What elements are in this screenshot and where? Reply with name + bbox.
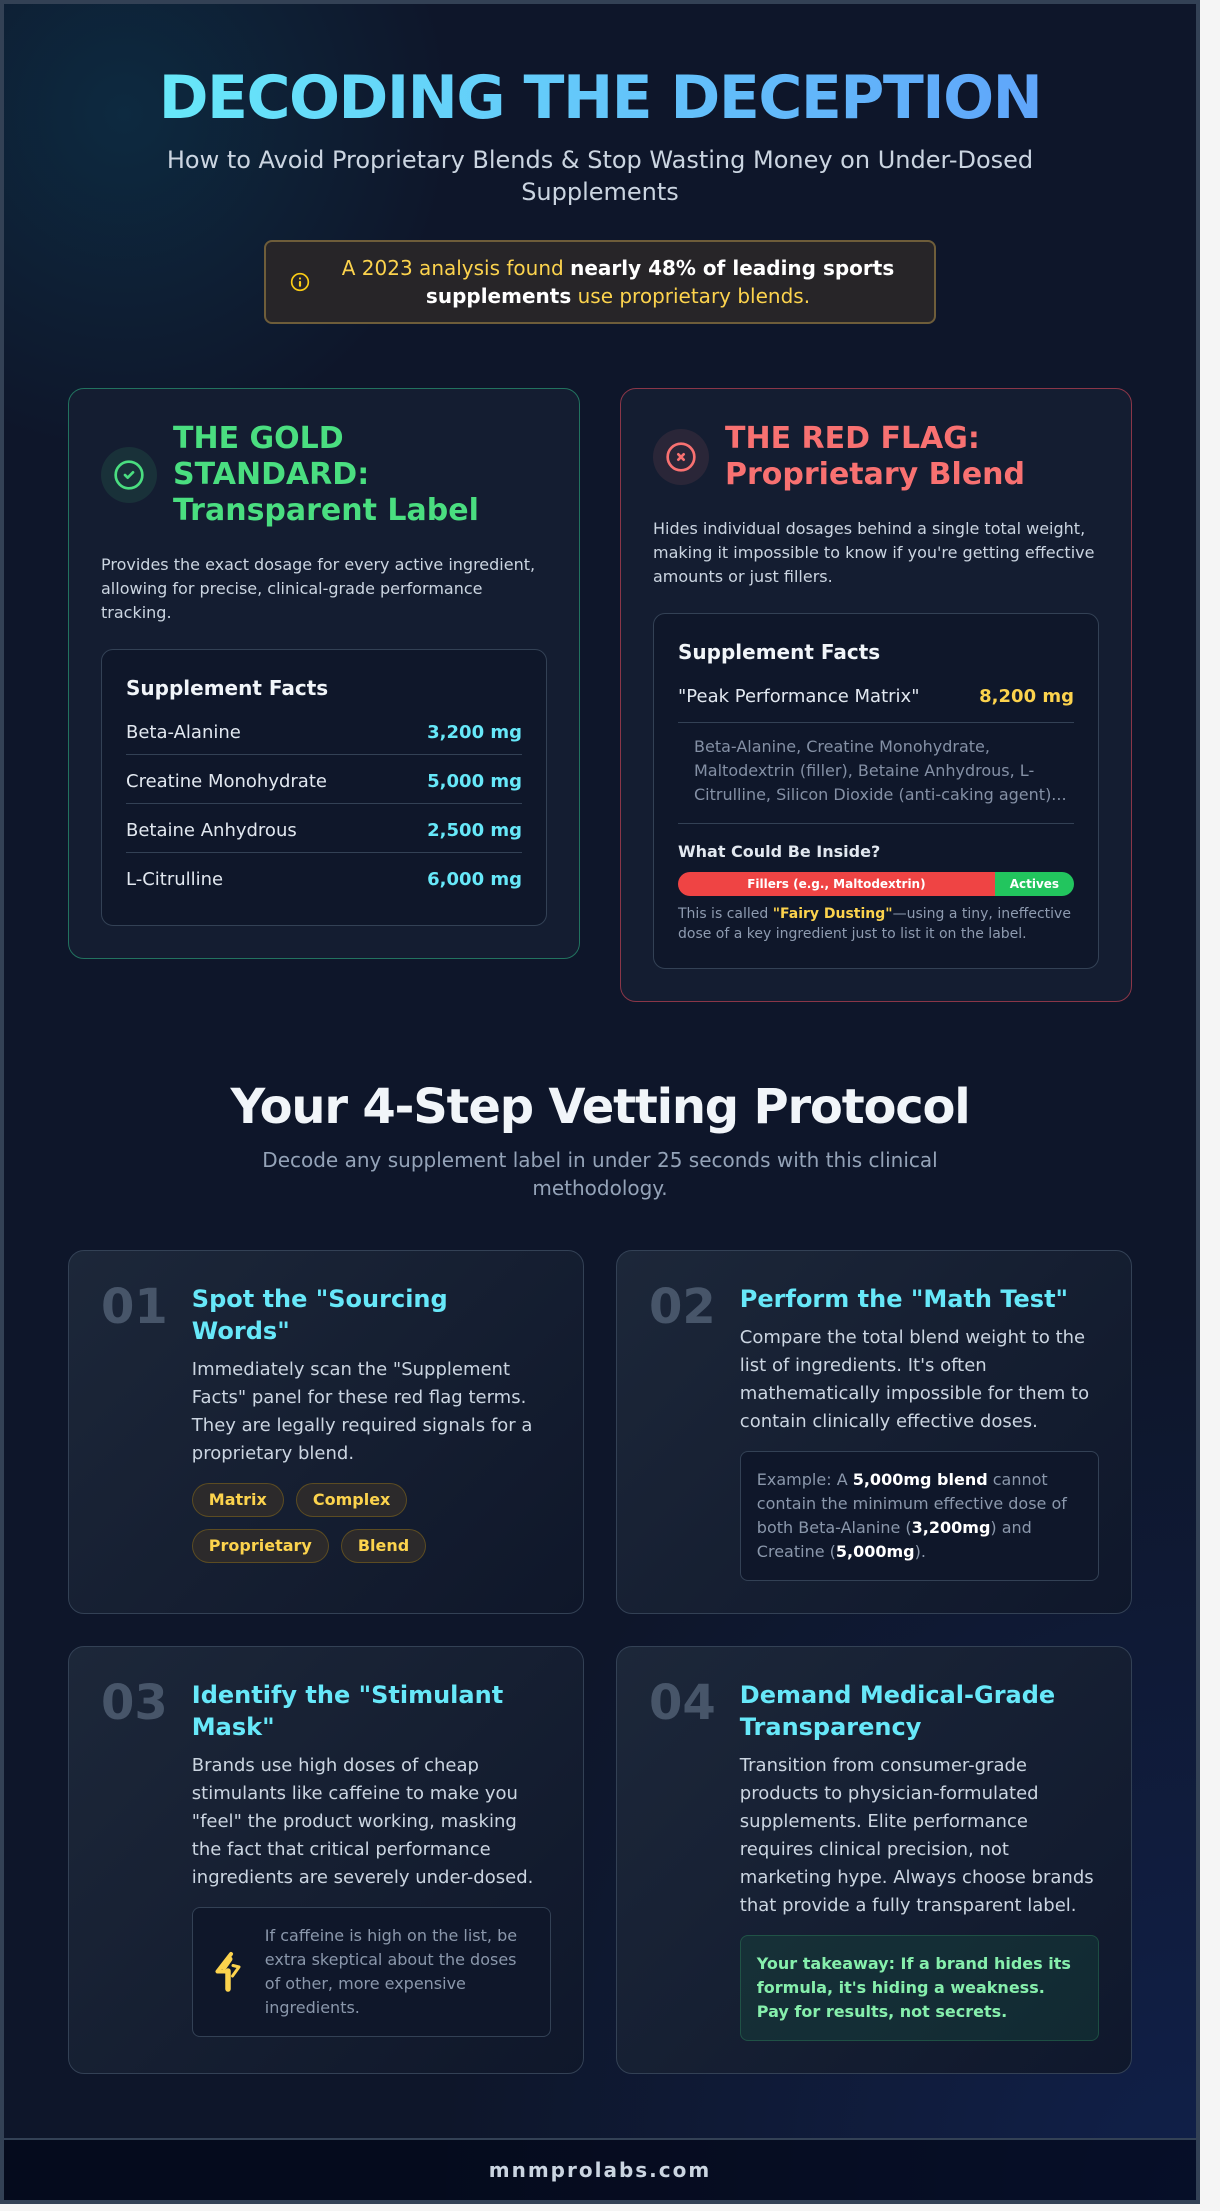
proprietary supplement facts label: "Peak Performance Matrix" (678, 686, 919, 707)
transparent supplement facts label: Supplement Facts (126, 676, 328, 700)
proprietary supplement facts label: 8,200 mg (979, 686, 1074, 707)
transparent supplement facts label: Betaine Anhydrous (126, 820, 297, 841)
header (159, 63, 1041, 324)
step 3 (68, 1646, 584, 2074)
section heading: Decode any supplement label in under 25 seconds with this clinical methodology. (262, 1148, 938, 1200)
transparent supplement facts label: 6,000 mg (427, 869, 522, 890)
step 3: Identify the "Stimulant Mask" (192, 1681, 503, 1741)
transparent supplement facts label: Beta-Alanine (126, 722, 241, 743)
fairy dusting note: This is called "Fairy Dusting"—using a tiny, ineffective dose of a key ingredient just to list it on the label. (678, 906, 1071, 942)
gold standard heading: THE GOLD STANDARD: Transparent Label (173, 421, 479, 528)
caffeine note: If caffeine is high on the list, be extra skeptical about the doses of other, more expensive ingredients. (265, 1926, 517, 2017)
footer: mnmprolabs.com (489, 2158, 711, 2182)
step 1 (68, 1250, 584, 1614)
icon: info (290, 272, 310, 292)
subtitle: How to Avoid Proprietary Blends & Stop Wasting Money on Under-Dosed Supplements (167, 146, 1033, 206)
example note: Example: A 5,000mg blend cannot contain the minimum effective dose of both Beta-Alanine (3,200mg) and Creatine (5,000mg). (757, 1470, 1067, 1561)
takeaway note (740, 1935, 1099, 2041)
steps grid (68, 1250, 1132, 2074)
step 1: Spot the "Sourcing Words" (192, 1285, 448, 1345)
step 3: Brands use high doses of cheap stimulants like caffeine to make you "feel" the product working, masking the fact that critical performance ingredients are severely under-dosed. (192, 1755, 533, 1888)
takeaway note: Your takeaway: If a brand hides its formula, it's hiding a weakness. Pay for results, not secrets. (757, 1954, 1071, 2021)
step 3: 03 (101, 1675, 168, 1731)
panel: red flag (620, 388, 1132, 1002)
section heading (230, 1079, 970, 1200)
step 2: Compare the total blend weight to the list of ingredients. It's often mathematically impossible for them to contain clinically effective doses. (740, 1327, 1089, 1432)
icon: bolt (215, 1952, 240, 1992)
comparison panels (68, 388, 1132, 1002)
red flag term pills: Matrix (209, 1490, 267, 1509)
transparent supplement facts label: Creatine Monohydrate (126, 771, 327, 792)
icon: check circle (101, 447, 157, 503)
step 2: 02 (649, 1279, 716, 1335)
title: DECODING THE DECEPTION (159, 63, 1041, 133)
stacked bar: fillers vs actives: Actives (1010, 877, 1059, 891)
callout: 48% statistic (264, 240, 936, 324)
step 2 (616, 1250, 1132, 1614)
icon: x circle (653, 429, 709, 485)
transparent supplement facts label (101, 649, 547, 926)
section heading: Your 4-Step Vetting Protocol (230, 1079, 970, 1135)
stacked bar: fillers vs actives: Fillers (e.g., Maltodextrin) (747, 877, 926, 891)
step 4 (616, 1646, 1132, 2074)
transparent supplement facts label: 5,000 mg (427, 771, 522, 792)
red flag term pills: Complex (313, 1490, 390, 1509)
red flag heading: THE RED FLAG: Proprietary Blend (725, 421, 1025, 492)
step 4: Demand Medical-Grade Transparency (740, 1681, 1055, 1741)
red flag description: Hides individual dosages behind a single total weight, making it impossible to know if you're getting effective amounts or just fillers. (653, 519, 1094, 586)
footer (4, 2138, 1196, 2200)
proprietary supplement facts label (653, 613, 1099, 969)
transparent supplement facts label: 2,500 mg (427, 820, 522, 841)
transparent supplement facts label: L-Citrulline (126, 869, 223, 890)
panel: gold standard (68, 388, 580, 959)
step 4: Transition from consumer-grade products to physician-formulated supplements. Elite performance requires clinical precision, not marketing hype. Always choose brands that provide a fully transparent label. (740, 1755, 1094, 1916)
transparent supplement facts label: 3,200 mg (427, 722, 522, 743)
step 2: Perform the "Math Test" (740, 1285, 1068, 1313)
stacked bar: fillers vs actives (678, 872, 1074, 896)
step 1: Immediately scan the "Supplement Facts" panel for these red flag terms. They are legally required signals for a proprietary blend. (192, 1359, 532, 1464)
step 1: 01 (101, 1279, 168, 1335)
proprietary supplement facts label: Supplement Facts (678, 640, 880, 664)
proprietary supplement facts label: Beta-Alanine, Creatine Monohydrate, Maltodextrin (filler), Betaine Anhydrous, L-Citrulline, Silicon Dioxide (anti-caking agent)... (694, 737, 1067, 804)
callout: 48% statistic: A 2023 analysis found nearly 48% of leading sports supplements use proprietary blends. (342, 256, 894, 308)
red flag term pills: Proprietary (209, 1536, 312, 1555)
gold standard description: Provides the exact dosage for every active ingredient, allowing for precise, clinical-grade performance tracking. (101, 555, 535, 622)
example note (740, 1451, 1099, 1581)
red flag term pills (192, 1483, 426, 1563)
red flag term pills: Blend (358, 1536, 409, 1555)
proprietary supplement facts label: What Could Be Inside? (678, 842, 880, 861)
caffeine note (192, 1907, 551, 2037)
step 4: 04 (649, 1675, 716, 1731)
